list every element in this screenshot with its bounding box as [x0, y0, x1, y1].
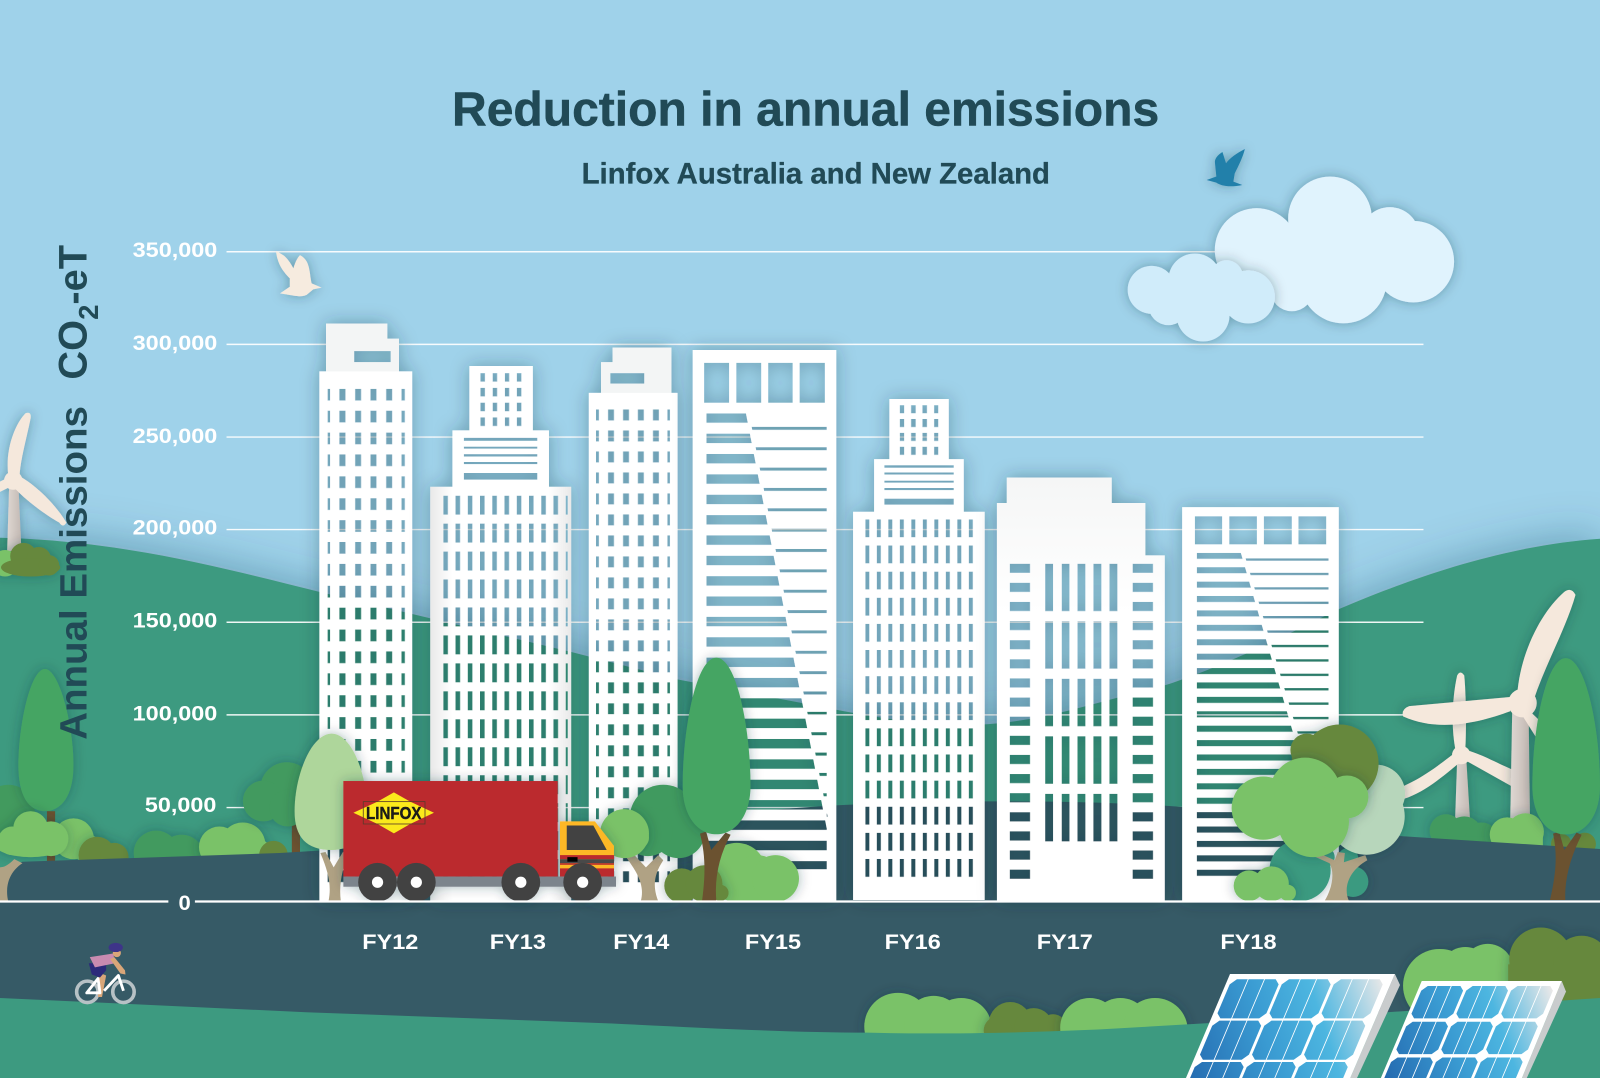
- truck chassis: [343, 877, 616, 887]
- building: FY15: [693, 350, 836, 901]
- building: FY13: [430, 366, 571, 901]
- building: FY12: [319, 323, 412, 901]
- left hill bush: [0, 543, 60, 577]
- green hills: [0, 538, 1600, 918]
- baseline axis: [0, 900, 1600, 903]
- y axis title: [52, 245, 104, 740]
- x axis year labels: FY12: [362, 930, 418, 954]
- subtitle: Linfox Australia and New Zealand: [582, 158, 1050, 191]
- icon: blue bird: [1207, 149, 1245, 186]
- y axis labels: 350,000: [133, 238, 217, 262]
- Linfox logo: LINFOX: [366, 803, 422, 823]
- x axis year labels: FY17: [1037, 930, 1093, 954]
- tree cluster at FY18: [1232, 724, 1405, 901]
- x axis year labels: FY18: [1220, 930, 1277, 954]
- light tree beside truck: [295, 734, 367, 901]
- tall tree at far right: [1532, 658, 1600, 900]
- y axis labels: [133, 238, 217, 915]
- y axis title: Annual Emissions: [53, 406, 95, 740]
- big cloud: [1215, 177, 1454, 323]
- x axis year labels: FY15: [745, 930, 801, 954]
- small cloud: [1128, 253, 1275, 342]
- left wind turbine: [0, 413, 66, 551]
- x axis year labels: FY16: [885, 930, 941, 954]
- small right wind turbine: [1400, 672, 1514, 819]
- solar panel right: [1378, 981, 1566, 1078]
- y axis title: 2: [73, 305, 104, 320]
- y axis labels: 250,000: [133, 424, 217, 448]
- tall tree at FY15: [683, 658, 751, 901]
- building: FY18: [1182, 507, 1339, 901]
- building: FY17: [997, 478, 1165, 901]
- truck wheels: [358, 863, 602, 902]
- dark road band: [0, 801, 1600, 1078]
- title: Reduction in annual emissions: [452, 83, 1159, 137]
- lower green meadow: [0, 998, 1600, 1078]
- y axis title: CO: [52, 320, 96, 380]
- Linfox logo: [353, 792, 434, 833]
- chart gridlines: [227, 252, 1423, 808]
- y axis labels: 200,000: [133, 516, 217, 540]
- x axis year labels: FY13: [490, 930, 546, 954]
- tree beside FY14: [600, 785, 705, 901]
- y axis labels: 0: [179, 891, 191, 915]
- x axis year labels: [362, 930, 1277, 954]
- bushes behind lower meadow: [864, 928, 1600, 1063]
- building: FY14: [589, 347, 678, 901]
- y axis labels: 100,000: [133, 701, 217, 725]
- y axis labels: 50,000: [145, 793, 216, 817]
- building: FY16: [853, 399, 985, 900]
- left trees and bushes on hill: [0, 669, 313, 880]
- icon: cyclist: [77, 943, 134, 1003]
- icon: cream bird: [276, 251, 322, 296]
- solar panel left: [1180, 974, 1400, 1078]
- bushes at FY15 base: [664, 843, 799, 904]
- left tree trunk: [0, 859, 22, 901]
- x axis year labels: FY14: [613, 930, 669, 954]
- truck cab: [560, 821, 614, 877]
- truck cargo box: [343, 781, 558, 877]
- y axis labels: 150,000: [133, 609, 217, 633]
- y axis labels: 300,000: [133, 331, 217, 355]
- y axis title: -eT: [52, 245, 96, 305]
- delivery truck: [343, 781, 616, 902]
- large right wind turbine: [1403, 590, 1576, 821]
- right hillside bushes: [1430, 813, 1596, 855]
